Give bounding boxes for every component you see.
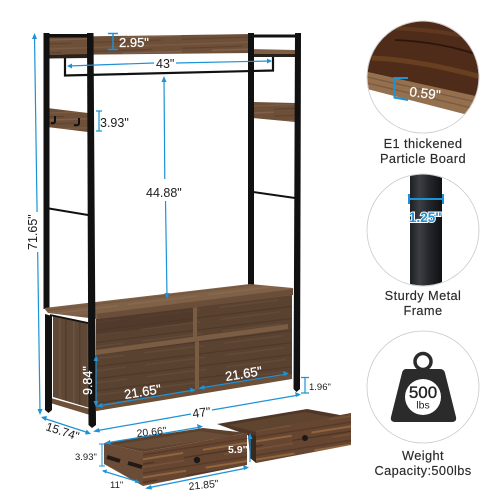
upper shelf (96, 324, 288, 355)
dividers (193, 307, 197, 338)
drawer right (217, 409, 351, 463)
dimension: 21.65 left: 21.65" (123, 381, 163, 402)
side bottom rail (47, 397, 90, 415)
bracket (409, 194, 443, 204)
top shelf board (47, 34, 250, 55)
metal posts (45, 33, 301, 428)
wood hook panel left (47, 108, 88, 132)
dimension: 20.66: 20.66" (136, 425, 167, 440)
cross bars (49, 192, 295, 215)
circle image (368, 22, 478, 114)
measurement: 0.59" (409, 84, 442, 103)
dimension: 43 (67, 57, 272, 71)
cabinet top board (44, 284, 293, 319)
icon: weight (391, 354, 456, 422)
caption: metal frame: Sturdy Metal (385, 288, 461, 303)
panel: particle board detail (366, 20, 480, 134)
dimension: 15.74: 15.74" (44, 420, 81, 443)
dimension: 44.88 (146, 76, 182, 299)
icon: weight: lbs (416, 400, 430, 412)
dimension: overall height 71.65: 71.65" (26, 214, 40, 250)
caption: particle board: Particle Board (380, 151, 466, 166)
cabinet (44, 284, 293, 415)
caption: weight capacity: Weight (402, 448, 444, 463)
dimension: 3.93 hook (96, 111, 129, 131)
dimension: 11 (102, 470, 140, 491)
dimension: 1.96: 1.96" (309, 382, 331, 393)
dimension: 5.9 (228, 433, 252, 462)
dimension: 43: 43" (156, 57, 174, 71)
dimension: overall height 71.65 (25, 33, 43, 415)
hanging rod (65, 57, 273, 76)
panel: weight capacity (367, 331, 479, 443)
dimension: 1.96 (301, 378, 331, 393)
upper compartment shadow (96, 308, 193, 335)
dimension: 2.95: 2.95" (119, 35, 149, 50)
caption: weight capacity: Capacity:500lbs (374, 463, 472, 478)
panel: metal frame detail (366, 174, 480, 286)
dimension: 21.65 left (96, 381, 196, 408)
circle image (410, 174, 458, 286)
top frame rails (46, 34, 88, 38)
dimension: 47: 47" (191, 405, 212, 421)
dimension: 21.85: 21.85" (188, 478, 219, 493)
dimension: 3.93 hook: 3.93" (100, 116, 129, 130)
dimension: 21.65 right: 21.65" (224, 363, 264, 384)
hooks (51, 116, 79, 125)
caption: weight capacity (374, 448, 472, 478)
dimension: 21.65 right (198, 363, 289, 390)
measurement: 1.25" (409, 210, 442, 225)
dimension: 5.9: 5.9" (228, 444, 248, 456)
dimension: 21.85 (145, 465, 249, 493)
right lower top shelf (250, 49, 295, 54)
circle outline (367, 331, 479, 443)
cabinet bottom board (96, 374, 292, 411)
icon: weight: 500 (409, 383, 437, 402)
dimension: 9.84: 9.84" (81, 366, 95, 395)
caption: particle board (380, 136, 466, 166)
bracket (394, 78, 408, 100)
drawer left (104, 428, 247, 486)
caption: metal frame (385, 288, 461, 318)
dimension: 20.66 (104, 424, 203, 444)
dimension: 15.74 (41, 416, 91, 443)
dimension: 11: 11" (110, 480, 123, 491)
dimension: 9.84 (81, 355, 98, 407)
rear posts (44, 33, 50, 309)
caption: particle board: E1 thickened (384, 136, 462, 151)
cabinet back (96, 295, 292, 411)
dimension: 3.93 drawer (75, 444, 105, 466)
wood panel right (252, 102, 295, 122)
circle outline (367, 21, 479, 133)
drawers (104, 409, 351, 486)
cabinet side (53, 316, 90, 408)
circle outline (367, 174, 479, 286)
dimension: 2.95 (108, 34, 149, 50)
dimension: 3.93 drawer: 3.93" (75, 452, 97, 463)
dimension: 44.88: 44.88" (146, 186, 182, 200)
dimension: 47 (93, 392, 301, 432)
hall tree frame and top shelf (44, 33, 297, 309)
caption: metal frame: Frame (404, 303, 442, 318)
